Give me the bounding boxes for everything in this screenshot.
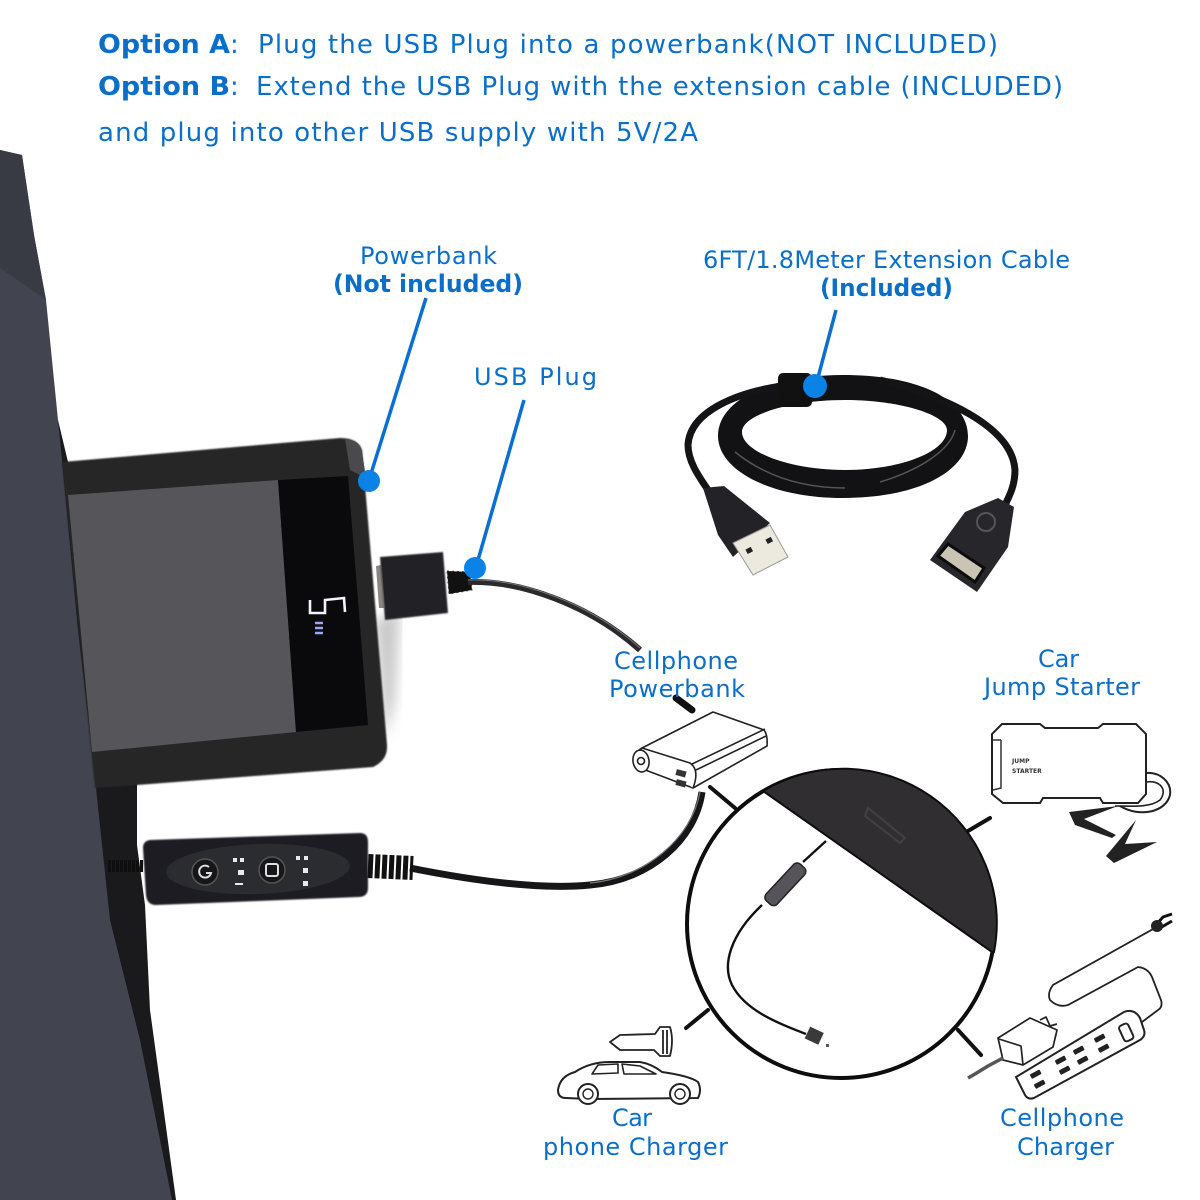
mode button: [259, 857, 285, 883]
pointer: extension cable: [803, 310, 836, 398]
extension cable: [688, 373, 1015, 592]
label: car phone charger: phone Charger: [543, 1133, 728, 1161]
detail controller: [763, 861, 808, 908]
label: cellphone charger: [1000, 1104, 1124, 1161]
heading: power options: Extend the USB Plug with the extension cable (INCLUDED): [256, 72, 1063, 102]
label: cellphone powerbank: Powerbank: [609, 675, 745, 703]
detail cable: [728, 841, 826, 1034]
power button: [192, 859, 218, 885]
indicator lights: [233, 856, 308, 886]
pointer: powerbank: [358, 298, 426, 492]
heading: power options: :: [230, 72, 239, 102]
dark strip behind cushion edge: [50, 410, 176, 1200]
label: cellphone powerbank: [609, 647, 745, 703]
outer loop left: [688, 386, 782, 490]
label: usb plug: USB Plug: [474, 363, 597, 391]
label: car jump starter: Jump Starter: [982, 673, 1140, 701]
pointer: usb plug: [464, 400, 524, 579]
label: extension cable: 6FT/1.8Meter Extension Cable: [703, 246, 1070, 274]
icon: cellphone powerbank: [631, 712, 767, 788]
dark pad: [763, 769, 997, 952]
label: cellphone charger: Cellphone: [1000, 1104, 1124, 1132]
label: car jump starter: [982, 645, 1140, 701]
heading: power options: :: [230, 30, 239, 60]
icon: car jump starter: JUMP: [1011, 758, 1030, 765]
icon: car jump starter: STARTER: [1012, 768, 1042, 775]
heading: power options: Option A: [98, 30, 230, 60]
label: car phone charger: Car: [612, 1104, 652, 1132]
icon: car charger: [610, 1027, 672, 1056]
powerbank grey face: [68, 480, 296, 752]
coil: [718, 375, 968, 498]
label: powerbank: [333, 242, 523, 298]
label: car jump starter: Car: [1038, 645, 1079, 673]
connector ticks: [686, 787, 990, 1055]
usb female: [930, 498, 1014, 592]
cable left of controller: [108, 860, 144, 872]
controller cable: [368, 792, 702, 886]
label: car phone charger: [543, 1104, 728, 1161]
icon: car jump starter: [992, 724, 1170, 863]
usb cable segment near powerbank icon: [676, 698, 692, 710]
detail plug: [805, 1027, 824, 1045]
icon: power strip: [1016, 914, 1172, 1099]
clamp one: [1069, 806, 1118, 838]
controller: [143, 833, 368, 905]
heading: power options: Option B: [98, 72, 230, 102]
clamp two: [1106, 820, 1157, 863]
heading: power options: Plug the USB Plug into a powerbank(NOT INCLUDED): [258, 30, 998, 60]
icon: phone charger: [968, 1017, 1057, 1078]
label: cellphone powerbank: Cellphone: [614, 647, 738, 675]
powerbank display: [278, 476, 368, 732]
power cord: [1049, 928, 1162, 1022]
heading: power options: and plug into other USB supply with 5V/2A: [98, 118, 698, 148]
icon: car: [558, 1062, 700, 1104]
label: extension cable: (Included): [820, 274, 953, 302]
label: powerbank: Powerbank: [360, 242, 497, 270]
detail circle: [687, 769, 997, 1078]
usb male: [703, 486, 770, 557]
plug: [1155, 914, 1172, 928]
outer loop right: [880, 380, 1015, 507]
label: extension cable: [703, 246, 1070, 302]
heated cushion: [0, 150, 176, 1200]
label: cellphone charger: Charger: [1017, 1133, 1114, 1161]
ferrite: [778, 373, 812, 407]
label: powerbank: (Not included): [333, 270, 523, 298]
display digit: [310, 598, 345, 633]
usb plug in powerbank: [376, 552, 472, 620]
usb cable top: [468, 580, 640, 650]
heading: power options: [98, 30, 1063, 148]
powerbank: [62, 438, 400, 788]
